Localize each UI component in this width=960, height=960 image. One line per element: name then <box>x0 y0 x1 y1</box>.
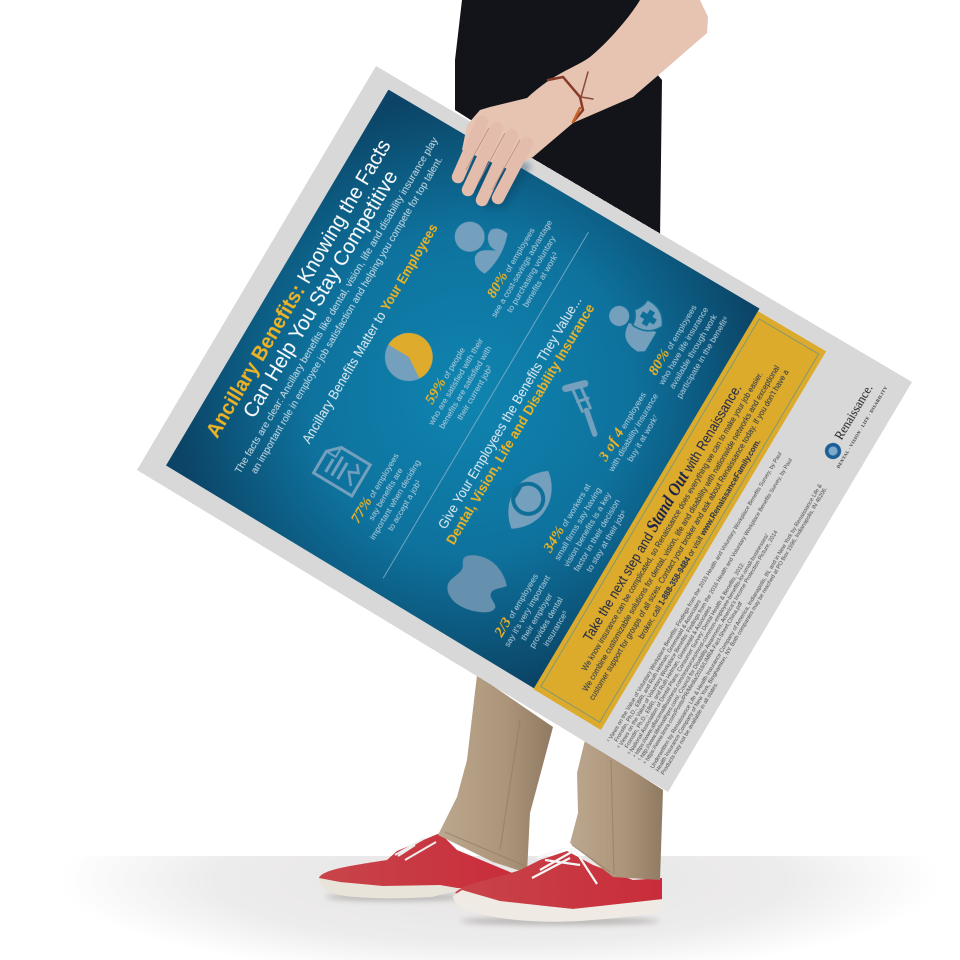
title: Ancillary Benefits: Knowing the Facts <box>201 135 394 441</box>
stat: 77 percent: say benefits are <box>364 462 402 519</box>
footnotes: Underwritten by Renaissance Life & Health Insurance Company of America, Indianapolis, IN, and in New York by Renaissance Life & <box>640 475 810 758</box>
heading: your employees: Ancillary Benefits Matter to Your Employees <box>297 219 439 444</box>
stat: 80 percent cost savings: benefits at work³ <box>516 248 556 307</box>
stat: 3 of 4: buy it at work⁷ <box>617 408 652 458</box>
icon: business person <box>445 210 512 276</box>
footnotes: Fronstin, Ph.D., EBRI, and Ruth Helman, Greenwald & Associates <box>615 596 702 739</box>
logo: Renaissance: DENTAL · VISION · LIFE · DISABILITY <box>821 378 873 461</box>
stat: 80 percent cost savings: 80% of employees <box>480 222 534 299</box>
stat: two thirds: provides dental <box>521 588 558 642</box>
stat: 59 percent: 59% of people <box>419 341 466 405</box>
stat: 77 percent: 77% of employees <box>346 447 400 523</box>
heading: dental vision life disability: Dental, Vision, Life and Disability Insurance <box>439 298 592 542</box>
stat: 34 percent: to stay at their job⁶ <box>577 502 621 567</box>
left trouser leg <box>438 675 553 873</box>
stat: 80 percent life insurance: available through work <box>659 308 710 386</box>
arm and hand <box>458 0 708 200</box>
stat: 80 percent cost savings: see a cost-savings advantage <box>485 216 550 317</box>
stat: two thirds: their employer <box>513 584 548 635</box>
floor <box>40 856 960 960</box>
shoe shadows <box>325 893 660 925</box>
hand shadow <box>462 150 532 208</box>
heading: give your employees: Give Your Employees the Benefits They Value... <box>431 290 579 527</box>
footnotes: ² Views on the Value of Voluntary Workplace Benefits: Findings from the 2016 Health and Voluntary Workplace Benefits Survey, by Paul <box>608 450 781 739</box>
stat: 34 percent: vision benefits is a key <box>555 484 606 562</box>
icon: crutch <box>553 376 614 434</box>
footnotes: Health Insurance Company of New York, Binghamton, NY. Both companies may be reached at PO Box 1596, Indianapolis, IN 46206. <box>645 478 815 761</box>
pie chart: 59 percent <box>376 324 442 390</box>
stat: two thirds: insurance⁵ <box>535 601 563 640</box>
stat: two thirds: say it's very important <box>496 566 546 642</box>
icon: document <box>314 442 370 496</box>
stat: 80 percent cost savings <box>476 210 573 330</box>
call to action heading: Take the next step and Stand Out with Renaissance. <box>569 374 735 636</box>
stat: 59 percent: who are satisfied with their <box>423 334 482 425</box>
stat: 3 of 4: 3 of 4 employees <box>588 384 642 460</box>
footnotes <box>606 451 838 776</box>
footnotes: ⁶ https://www.limra.com/Posts/PR/Media/2016/LIMRA-Fact-Sheet,China.pdf <box>632 591 732 754</box>
black shirt <box>455 0 662 240</box>
icon: doctor with shield <box>600 286 670 356</box>
footnotes: ⁵ http://www.lifehealthpro.com/, Council for Disability Awareness, America's Income Protection Picture, 2014 <box>627 521 767 751</box>
logo: Renaissance <box>819 375 889 469</box>
intro text: an important role in employee job satisfaction and helping you compete for top talent. <box>249 154 443 475</box>
footnotes: ³ National Association of Dental Plans, Consumer Survey: Dental Health & Benefits, 2012. <box>618 552 735 745</box>
stat: 80 percent life insurance: 80% of employees <box>638 297 692 374</box>
stat: two thirds: 2/3 of employees <box>486 564 536 634</box>
stat: 77 percent: important when deciding <box>365 454 420 538</box>
footnotes: Fronstin, Ph.D., EBRI, and Ruth Helman, Greenwald & Associates <box>605 590 692 733</box>
title: Can Help You Stay Competitive <box>238 166 401 421</box>
poster <box>137 66 912 792</box>
stat: 80 percent life insurance <box>642 295 731 400</box>
stat: 34 percent: small firms say having <box>546 479 596 556</box>
footnotes: ⁴ https://www.aflacsmallbusiness.com/resources/most-common-employee-benefits-for-small-businesses/ <box>622 524 758 748</box>
stat: 34 percent: 34% of workers at <box>534 474 588 550</box>
stat: 77 percent: to accept a job¹ <box>383 474 420 529</box>
stat: 59 percent: benefits are satisfied with <box>434 341 490 427</box>
stat: two thirds <box>489 565 581 666</box>
stat: 59 percent: their current job² <box>451 361 491 419</box>
icon: tooth <box>441 548 515 622</box>
stat: 3 of 4 <box>593 383 670 480</box>
stat: 80 percent life insurance: participate in the benefit⁸ <box>666 310 721 395</box>
call to action body: broker, call 1-888-358-9484 or visit www.RenaissanceFamily.com. <box>628 431 751 632</box>
panel: call to action <box>533 311 826 730</box>
stat: 80 percent life insurance: who have life insurance <box>648 301 702 383</box>
panel: blue background <box>166 90 760 688</box>
left shoe <box>319 833 517 898</box>
divider <box>383 232 588 578</box>
stat: 80 percent cost savings: to purchasing voluntary <box>501 231 553 312</box>
logo: Renaissance: Renaissance. <box>818 375 861 435</box>
footnotes: Products may not be available in all states. <box>650 670 708 764</box>
stat: 34 percent <box>539 476 633 580</box>
intro text: The facts are clear: Ancillary benefits like dental, vision, life and disability insurance play <box>233 135 439 474</box>
paper sheet <box>137 66 912 792</box>
icon: eye <box>496 461 563 539</box>
stat: 34 percent: factor in their decision <box>565 491 615 566</box>
stat: 77 percent <box>345 444 432 547</box>
footnotes: ¹ Views on the Value of Voluntary Workplace Benefits: Findings from the 2015 Health and Voluntary Workplace Benefits Survey, by Paul <box>598 444 771 733</box>
call to action body: We combine customizable solutions for dental, vision, life and disability with nationwide networks and exceptional <box>573 358 770 684</box>
right shoe <box>453 848 663 922</box>
stat: 3 of 4: with disability insurance <box>599 386 652 468</box>
right trouser leg <box>570 740 663 880</box>
call to action body: customer support for groups of all sizes. Contact your broker and ask about Renaissance today. If you don't have a <box>580 362 779 692</box>
bracelet <box>548 72 593 122</box>
stat: 59 percent <box>413 328 504 439</box>
call to action body: We know insurance can be complicated, so Renaissance does everything we can to make your job easier. <box>573 365 754 664</box>
